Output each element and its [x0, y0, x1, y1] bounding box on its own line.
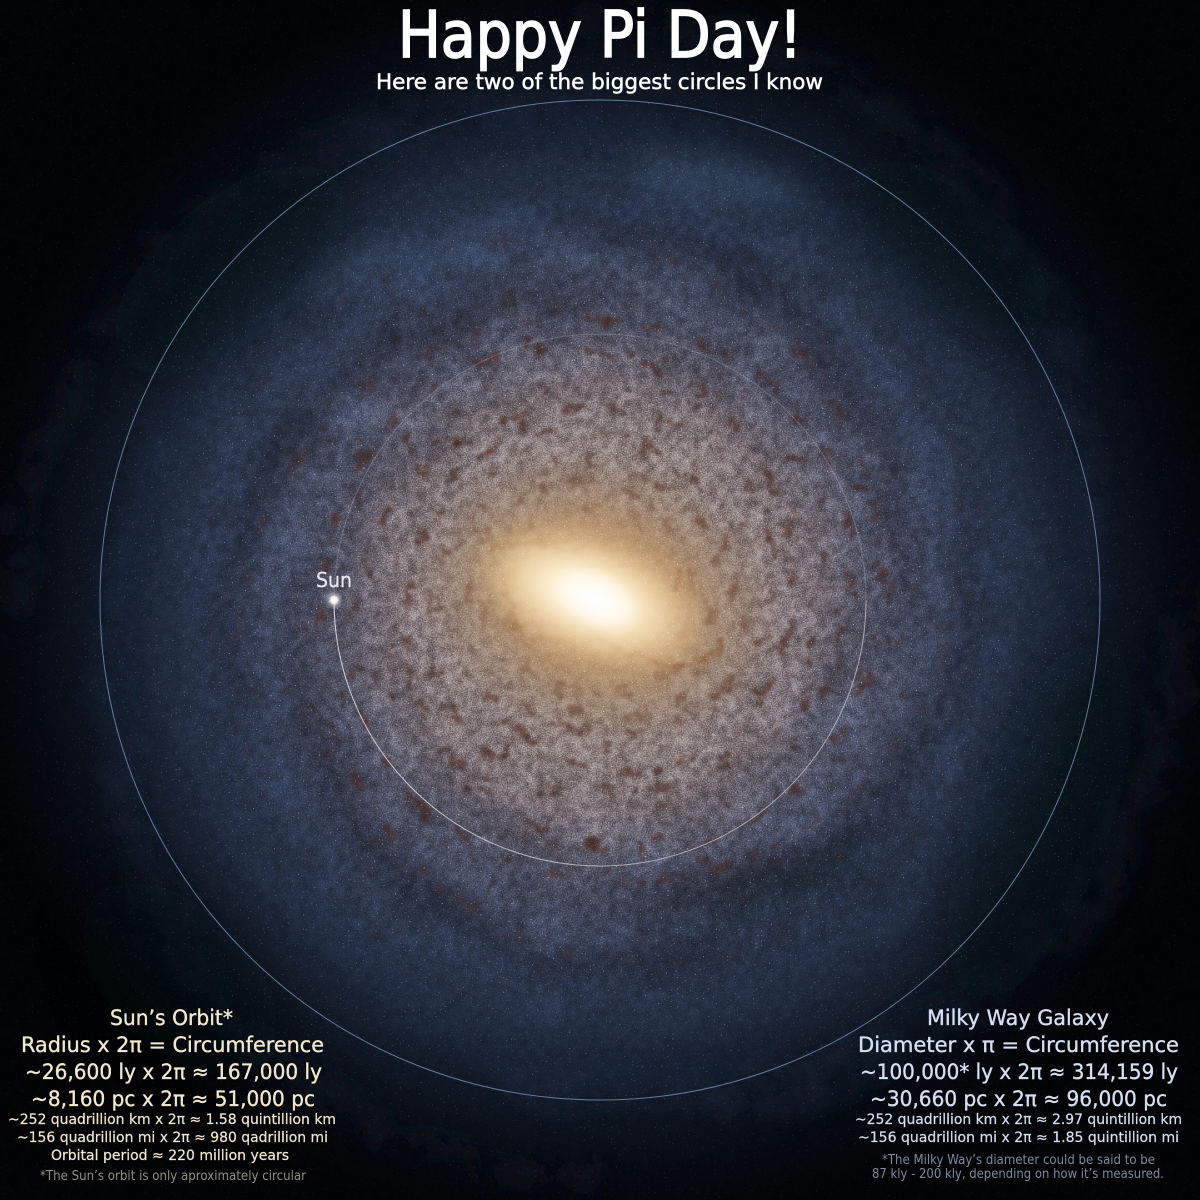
footnote: *The Sun’s orbit is only aproximately circular	[40, 1169, 307, 1184]
dust lanes	[206, 203, 981, 995]
Sun label: Sun	[316, 568, 352, 592]
footnote: *The Milky Way’s diameter could be said to be	[882, 1153, 1155, 1168]
parsec figures: ~30,660 pc x 2π ≈ 96,000 pc	[870, 1087, 1167, 1111]
dark inter-arm lanes	[79, 79, 1121, 1121]
bright orbit arc below the Sun	[334, 600, 866, 866]
fine star grain	[156, 148, 1043, 1044]
title: Happy Pi Day!	[398, 0, 802, 73]
heading: Milky Way: Milky Way Galaxy	[927, 1006, 1109, 1030]
galactic core	[540, 550, 656, 650]
mile figures: ~156 quadrillion mi x 2π ≈ 1.85 quintillion mi	[858, 1130, 1179, 1146]
light year figures: ~26,600 ly x 2π ≈ 167,000 ly	[25, 1060, 322, 1084]
footnote	[872, 1153, 1164, 1182]
orbital period: Orbital period ≈ 220 million years	[51, 1148, 289, 1164]
bulge dust lanes	[488, 543, 722, 667]
dark gaps in the outer disk	[46, 126, 1171, 1114]
bright bar	[446, 488, 734, 706]
icon: Sun	[324, 590, 344, 610]
heading: Sun's orbit: Sun’s Orbit*	[110, 1006, 233, 1030]
panel: Sun's orbit stats	[8, 1006, 336, 1184]
subtitle: Here are two of the biggest circles I know	[376, 70, 823, 94]
bright inner glow	[365, 365, 835, 835]
footnote: 87 kly - 200 kly, depending on how it’s measured.	[872, 1167, 1164, 1182]
formula: Radius x 2π = Circumference	[21, 1033, 324, 1057]
bulge halo	[370, 401, 822, 795]
mile figures: ~156 quadrillion mi x 2π ≈ 980 qadrillion mi	[17, 1130, 328, 1146]
circle: Sun's orbit	[334, 334, 866, 866]
circle: Milky Way circumference	[100, 100, 1100, 1100]
formula: Diameter x π = Circumference	[858, 1033, 1179, 1057]
kilometre figures: ~252 quadrillion km x 2π ≈ 2.97 quintillion km	[855, 1112, 1182, 1128]
blue star-forming clouds	[263, 146, 871, 870]
panel: Milky Way stats	[855, 1006, 1182, 1182]
parsec figures: ~8,160 pc x 2π ≈ 51,000 pc	[31, 1087, 315, 1111]
kilometre figures: ~252 quadrillion km x 2π ≈ 1.58 quintillion km	[8, 1112, 336, 1128]
light year figures: ~100,000* ly x 2π ≈ 314,159 ly	[860, 1060, 1178, 1084]
cloudy mottling	[176, 161, 1020, 1024]
